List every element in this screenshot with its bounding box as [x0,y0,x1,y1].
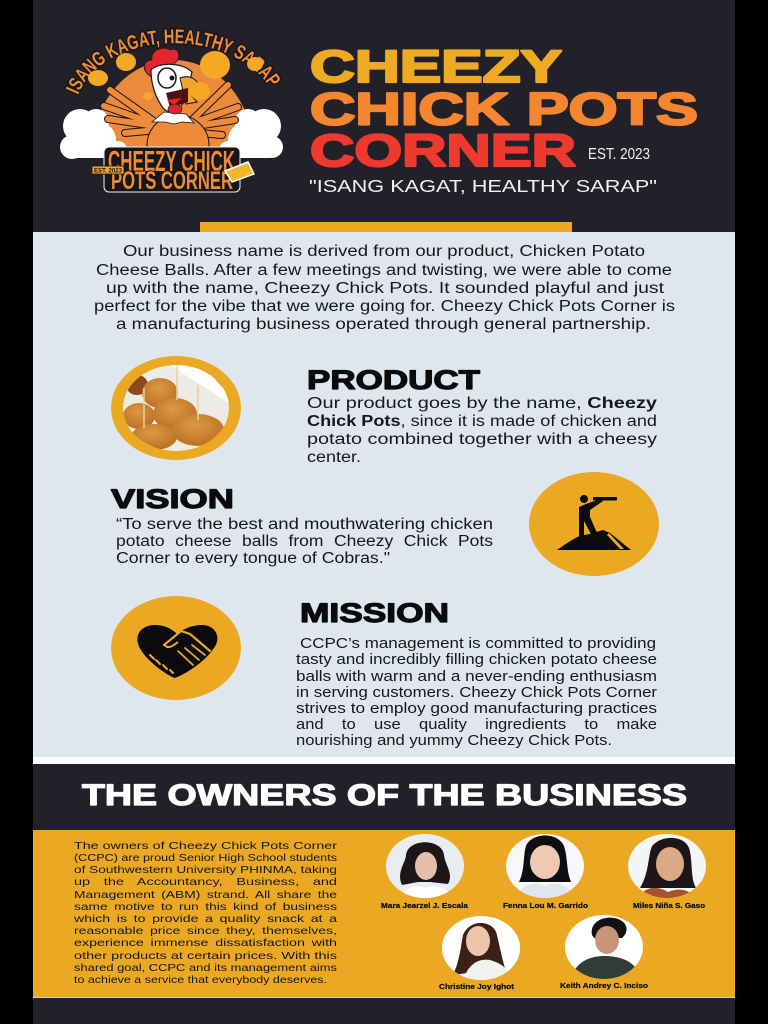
panel: about [33,232,735,758]
mission text: nourishing and yummy Cheezy Chick Pots. [296,733,612,749]
owners paragraph: up the Accountancy, Business, and [74,876,337,888]
logo chicken body [147,115,209,175]
intro paragraph: a manufacturing business operated through general partnership. [116,316,651,333]
intro paragraph: up with the name, Cheezy Chick Pots. It sounded playful and just [106,280,665,297]
intro paragraph: Our business name is derived from our product, Chicken Potato [123,243,645,260]
intro paragraph: perfect for the vibe that we were going for. Cheezy Chick Pots Corner is [94,298,675,315]
product text: Chick Pots , since it is made of chicken and [307,413,657,430]
mission text: balls with warm and a never-ending enthusiasm [296,669,657,685]
portrait: Fenna Lou M. Garrido [505,833,585,900]
header accent bar [200,222,572,232]
owners paragraph: other products at certain prices. With this [74,950,337,962]
owners paragraph: to achieve a service that everybody deserves. [74,974,327,986]
mission text: in serving customers. Cheezy Chick Pots Corner [296,685,657,701]
owner names: Christine Joy Ighot [439,982,515,991]
owners paragraph: which is to provide a quality snack at a [73,913,337,925]
owners paragraph: of Southwestern University PHINMA, taking [74,864,337,876]
vision text: Corner to every tongue of Cobras." [116,550,390,567]
logo chicken wings [104,85,238,135]
intro paragraph [94,243,675,333]
portrait: Miles Niña S. Gaso [627,833,707,900]
owner names: Keith Andrey C. Inciso [560,981,648,990]
product photo [111,356,241,460]
owners paragraph: (CCPC) are proud Senior High School students [74,852,337,864]
logo chicken head [144,48,200,124]
owners paragraph: reasonable price since they, themselves, [74,925,337,937]
mission text: and to use quality ingredients to make [296,717,657,733]
logo name banner: CHEEZY CHICK [108,146,235,178]
title: CHEEZY [310,41,562,92]
vision text: potato cheese balls from Cheezy Chick Pots [116,533,493,550]
vision text [116,516,493,567]
owners paragraph: Management (ABM) strand. All share the [74,889,337,901]
mission heading: MISSION [300,598,449,628]
logo name banner [92,146,254,195]
mission text: tasty and incredibly filling chicken potato cheese [296,652,657,668]
established year: EST. 2023 [588,146,650,163]
owners heading: THE OWNERS OF THE BUSINESS [82,779,687,812]
panel: footer band [33,997,735,1024]
logo name banner: POTS CORNER [111,167,233,195]
icon: handshake heart [111,596,241,700]
panel: owners [33,830,735,997]
icon: person with telescope [529,472,659,576]
owners paragraph: experience immense dissatisfaction with [74,937,337,949]
product heading: PRODUCT [307,365,481,395]
mission text [296,636,657,749]
owners paragraph [73,840,338,986]
owner names: Miles Niña S. Gaso [633,901,705,910]
logo sunburst [93,60,253,150]
product text [307,395,657,466]
logo arched slogan: ISANG KAGAT, HEALTHY SARAP [64,28,282,96]
owners paragraph: shared goal, CCPC and its management aims [74,962,337,974]
title [310,41,698,176]
panel: owners heading band [33,757,735,830]
panel: header [33,0,735,232]
owner names [381,901,705,991]
portrait: Christine Joy Ighot [442,916,520,980]
owner names: Fenna Lou M. Garrido [503,901,588,910]
vision text: “To serve the best and mouthwatering chicken [116,516,493,533]
vision heading: VISION [111,484,234,514]
portrait: Mara Jearzel J. Escala [385,833,465,900]
owner names: Mara Jearzel J. Escala [381,901,469,910]
title: CORNER [310,125,576,176]
logo: Cheezy Chick Pots Corner [60,28,283,195]
title: CHICK POTS [310,84,698,134]
owners paragraph: The owners of Cheezy Chick Pots Corner [74,840,338,852]
product text: Our product goes by the name, Cheezy [307,395,657,412]
logo cheese drips [88,51,263,100]
logo name banner: EST. 2023 [94,168,122,174]
portrait: Keith Andrey C. Inciso [565,915,643,979]
logo clouds [60,109,283,159]
product text: potato combined together with a cheesy [307,431,657,448]
mission text: strives to employ good manufacturing practices [296,701,657,717]
tagline: "ISANG KAGAT, HEALTHY SARAP" [309,176,657,196]
product text: center. [307,449,361,466]
owners paragraph: same motive to run this kind of business [74,901,337,913]
intro paragraph: Cheese Balls. After a few meetings and twisting, we were able to come [96,262,672,279]
mission text: CCPC’s management is committed to providing [300,636,656,652]
